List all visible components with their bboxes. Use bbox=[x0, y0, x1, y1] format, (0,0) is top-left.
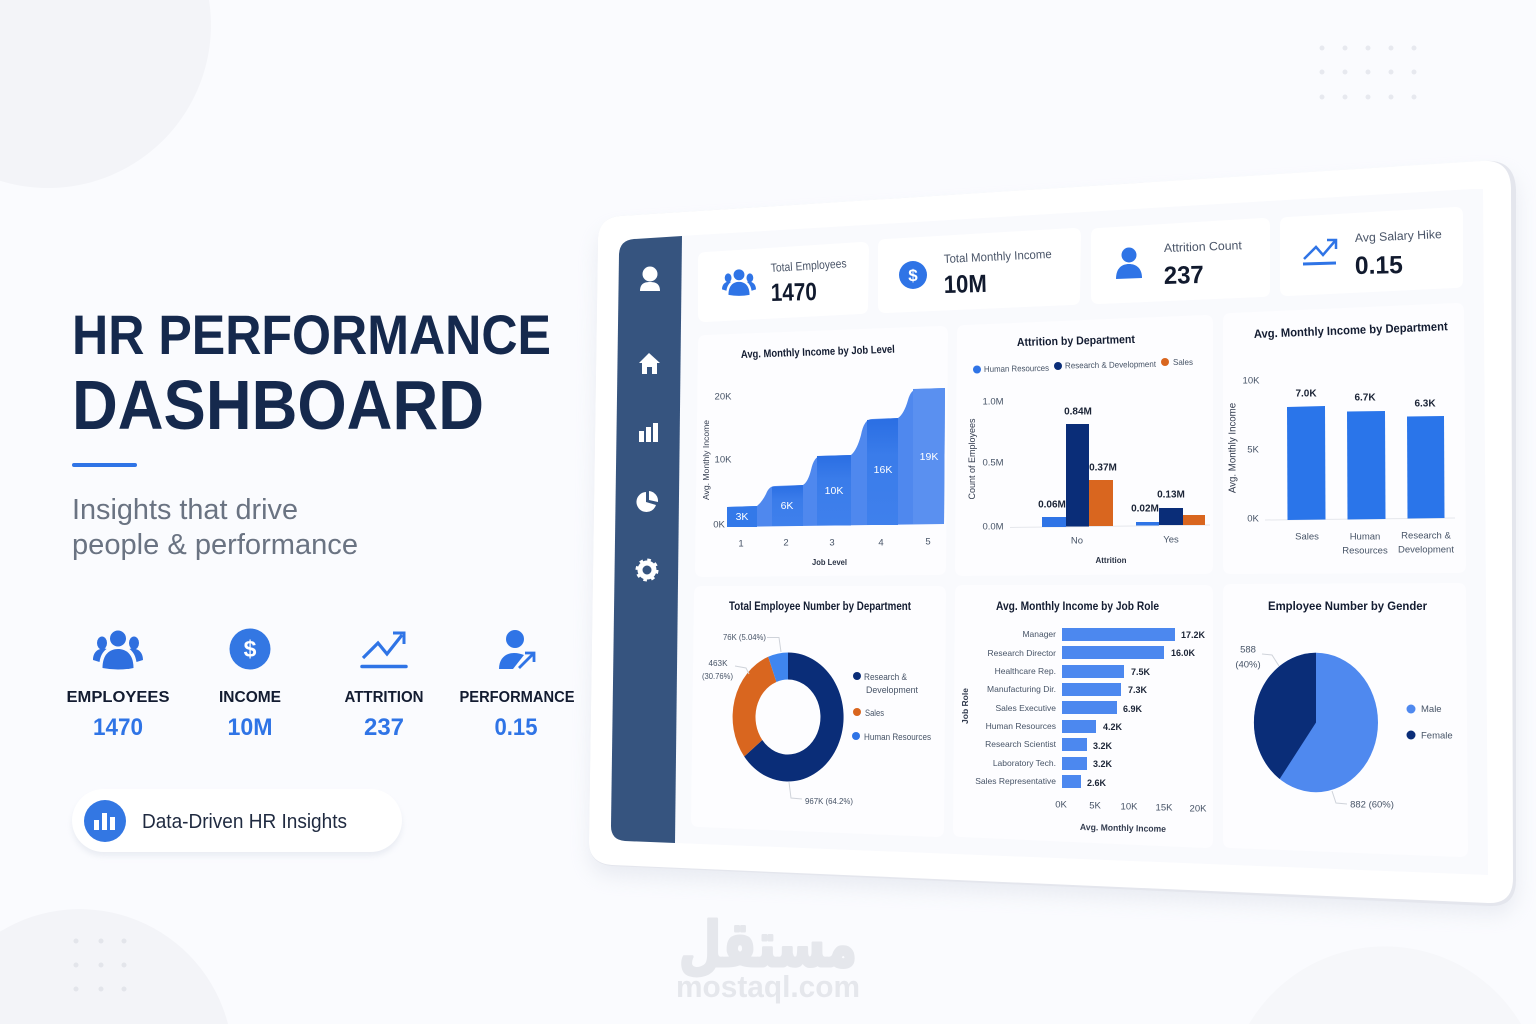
axis labels: Human bbox=[1350, 532, 1380, 542]
axis labels: 0.0M bbox=[982, 522, 1004, 532]
axis labels: 20K bbox=[1190, 804, 1207, 814]
chart card: income by job role: Avg. Monthly Income by Job Role bbox=[996, 599, 1159, 613]
subtitle bbox=[72, 494, 358, 561]
horizontal bar chart: 3.2K bbox=[1093, 741, 1113, 751]
stat: attrition bbox=[344, 633, 424, 741]
horizontal bar chart: Manufacturing Dir. bbox=[987, 684, 1056, 694]
axis labels: 0K bbox=[713, 520, 725, 530]
badge: data-driven insights: Data-Driven HR Insights bbox=[142, 811, 347, 833]
donut labels: 76K (5.04%) bbox=[723, 632, 766, 642]
stat: income bbox=[219, 628, 281, 741]
donut labels: 967K (64.2%) bbox=[805, 796, 853, 806]
horizontal bar chart: 6.9K bbox=[1123, 704, 1143, 714]
stat: performance bbox=[460, 630, 575, 741]
kpi card: avg salary hike bbox=[1280, 207, 1463, 296]
icon: bars bbox=[84, 800, 126, 842]
stat: attrition: ATTRITION bbox=[344, 689, 424, 706]
horizontal bar chart: Healthcare Rep. bbox=[995, 666, 1056, 676]
axis labels: 0.5M bbox=[982, 458, 1004, 468]
accent line bbox=[72, 463, 137, 467]
icon: dollar bbox=[899, 261, 927, 289]
title: HR PERFORMANCE bbox=[72, 303, 551, 366]
kpi card: avg salary hike: 0.15 bbox=[1355, 251, 1403, 280]
horizontal bar chart: 17.2K bbox=[1181, 630, 1206, 640]
grouped bars: 0.84M bbox=[1064, 406, 1092, 418]
horizontal bar chart: 7.3K bbox=[1128, 685, 1148, 695]
icon: trend bbox=[1303, 240, 1336, 264]
bar chart: 6.3K bbox=[1414, 398, 1436, 410]
axis labels: Avg. Monthly Income bbox=[701, 420, 711, 500]
area chart: 10K bbox=[825, 485, 843, 497]
axis labels: Sales bbox=[1295, 532, 1319, 542]
bar chart: 6.7K bbox=[1354, 392, 1376, 404]
legend: Sales bbox=[1173, 357, 1193, 367]
kpi card: total monthly income: Total Monthly Income bbox=[943, 247, 1052, 266]
area chart bbox=[727, 388, 945, 527]
axis labels: 4 bbox=[878, 538, 884, 548]
subtitle: people & performance bbox=[72, 529, 358, 561]
legend: Sales bbox=[865, 708, 885, 718]
axis labels: 3 bbox=[829, 538, 835, 548]
sidebar bbox=[611, 236, 682, 843]
axis labels: 1.0M bbox=[982, 396, 1004, 408]
axis labels bbox=[1228, 376, 1454, 556]
background circle: top left bbox=[0, 0, 211, 188]
donut labels bbox=[702, 632, 853, 806]
chart card: employees by department: Total Employee Number by Department bbox=[729, 599, 911, 613]
icon: person bbox=[640, 266, 660, 291]
dashboard mockup bbox=[589, 161, 1516, 914]
axis labels: Research & bbox=[1401, 530, 1451, 542]
background circle: bottom right bbox=[1249, 946, 1521, 1024]
legend: Female bbox=[1421, 730, 1453, 742]
chart card: attrition by department: Attrition by Department bbox=[1017, 334, 1135, 349]
icon: bar chart bbox=[639, 423, 658, 442]
kpi card: attrition count: 237 bbox=[1163, 261, 1204, 290]
axis labels: No bbox=[1071, 536, 1083, 546]
legend: Development bbox=[866, 685, 919, 695]
area chart: 6K bbox=[781, 500, 793, 512]
horizontal bar chart: Sales Representative bbox=[975, 776, 1056, 786]
legend: Human Resources bbox=[864, 732, 932, 742]
kpi card: total employees: 1470 bbox=[771, 278, 817, 307]
bar chart: 7.0K bbox=[1295, 388, 1317, 400]
dot grid: top right bbox=[1320, 46, 1416, 100]
stat: performance: 0.15 bbox=[494, 714, 538, 741]
axis labels bbox=[960, 688, 1207, 834]
horizontal bar chart: Sales Executive bbox=[996, 703, 1056, 713]
axis labels: 10K bbox=[1243, 376, 1260, 386]
axis labels: 5 bbox=[925, 536, 931, 548]
kpi card: total employees bbox=[698, 242, 869, 322]
pie labels bbox=[1235, 644, 1394, 810]
axis labels: Yes bbox=[1163, 534, 1179, 546]
axis labels: Avg. Monthly Income bbox=[1228, 403, 1238, 493]
icon: trend bbox=[362, 633, 406, 666]
legend: Male bbox=[1421, 704, 1442, 715]
horizontal bar chart: Manager bbox=[1022, 629, 1056, 639]
axis labels: Resources bbox=[1342, 546, 1388, 556]
horizontal bar chart: 7.5K bbox=[1131, 667, 1151, 677]
grouped bars bbox=[1010, 406, 1210, 528]
chart card: income by job level: Avg. Monthly Income by Job Level bbox=[741, 344, 895, 361]
axis labels: Development bbox=[1398, 544, 1454, 556]
chart card: employees by gender bbox=[1223, 583, 1468, 857]
grouped bars: 0.06M bbox=[1038, 500, 1066, 510]
axis labels: 15K bbox=[1156, 802, 1173, 814]
icon: people bbox=[722, 269, 756, 296]
stat: attrition: 237 bbox=[364, 714, 404, 741]
grouped bars: 0.13M bbox=[1157, 490, 1185, 500]
pie labels: (40%) bbox=[1235, 660, 1261, 670]
axis labels: Avg. Monthly Income bbox=[1080, 822, 1166, 834]
grouped bars: 0.37M bbox=[1089, 462, 1117, 474]
axis labels bbox=[701, 392, 931, 567]
axis labels: 2 bbox=[783, 538, 789, 548]
kpi card: avg salary hike: Avg Salary Hike bbox=[1355, 227, 1442, 245]
legend: Human Resources bbox=[984, 363, 1049, 374]
stat: employees: 1470 bbox=[93, 714, 143, 741]
chart card: employees by department bbox=[691, 586, 946, 837]
icon: dollar: $ bbox=[908, 266, 918, 285]
axis labels: Count of Employees bbox=[967, 418, 977, 500]
kpi card: total employees: Total Employees bbox=[770, 256, 847, 275]
chart card: income by department: Avg. Monthly Income by Department bbox=[1254, 319, 1448, 341]
icon: person bbox=[1116, 248, 1142, 279]
icon: pie bbox=[636, 491, 658, 512]
bar chart bbox=[1265, 388, 1455, 520]
pie labels: 588 bbox=[1240, 644, 1256, 656]
chart card: income by department bbox=[1223, 303, 1466, 574]
title bbox=[72, 303, 551, 444]
pie labels: 882 (60%) bbox=[1350, 800, 1394, 810]
horizontal bar chart: Human Resources bbox=[986, 721, 1056, 731]
stat: employees: EMPLOYEES bbox=[66, 689, 170, 706]
donut chart bbox=[733, 652, 844, 781]
icon: home bbox=[639, 353, 660, 374]
donut labels: (30.76%) bbox=[702, 671, 733, 681]
dot grid: bottom left bbox=[74, 938, 126, 992]
axis labels: 10K bbox=[715, 454, 732, 466]
chart card: income by job level bbox=[695, 326, 948, 577]
stat: performance: PERFORMANCE bbox=[460, 689, 575, 706]
axis labels: Job Role bbox=[960, 688, 970, 724]
legend bbox=[852, 672, 932, 742]
stat: income: 10M bbox=[228, 714, 272, 741]
legend bbox=[1406, 704, 1453, 742]
watermark: mostaql.com bbox=[676, 969, 860, 1004]
chart card: attrition by department bbox=[955, 315, 1213, 576]
axis labels: 10K bbox=[1121, 802, 1138, 812]
content background bbox=[675, 189, 1488, 875]
donut labels: 463K bbox=[708, 658, 728, 668]
horizontal bar chart bbox=[975, 628, 1206, 788]
chart card: employees by gender: Employee Number by Gender bbox=[1268, 599, 1427, 613]
horizontal bar chart: Research Scientist bbox=[985, 739, 1057, 749]
horizontal bar chart: 4.2K bbox=[1103, 722, 1123, 732]
background circle: bottom left bbox=[0, 909, 228, 1024]
kpi card: attrition count bbox=[1091, 218, 1270, 304]
legend: Research & bbox=[864, 672, 907, 682]
stat: income: INCOME bbox=[219, 689, 281, 706]
kpi card: attrition count: Attrition Count bbox=[1164, 238, 1243, 255]
subtitle: Insights that drive bbox=[72, 494, 298, 526]
legend: Research & Development bbox=[1065, 359, 1157, 370]
axis labels: 5K bbox=[1089, 800, 1101, 812]
axis labels: 1 bbox=[738, 538, 744, 550]
badge: data-driven insights bbox=[72, 789, 402, 856]
area chart: 16K bbox=[874, 464, 892, 476]
icon: person arrow bbox=[499, 630, 534, 669]
icon: people bbox=[93, 630, 143, 670]
watermark: مستقل bbox=[679, 908, 857, 981]
axis labels: Job Level bbox=[812, 557, 847, 567]
horizontal bar chart: 3.2K bbox=[1093, 759, 1113, 769]
legend bbox=[973, 357, 1193, 374]
kpi card: total monthly income: 10M bbox=[943, 270, 987, 299]
axis labels: 5K bbox=[1247, 444, 1259, 456]
watermark bbox=[676, 908, 860, 1004]
grouped bars: 0.02M bbox=[1131, 504, 1159, 514]
axis labels: Attrition bbox=[1096, 555, 1126, 565]
axis labels: 20K bbox=[715, 392, 732, 402]
icon: gear bbox=[637, 560, 657, 580]
kpi card: total monthly income bbox=[878, 228, 1081, 313]
axis labels: 0K bbox=[1055, 800, 1067, 810]
stat: employees bbox=[66, 630, 170, 741]
horizontal bar chart: Research Director bbox=[988, 648, 1056, 658]
horizontal bar chart: Laboratory Tech. bbox=[993, 758, 1056, 768]
icon: dollar: $ bbox=[244, 636, 257, 662]
horizontal bar chart: 16.0K bbox=[1171, 648, 1196, 658]
axis labels: 0K bbox=[1247, 514, 1259, 524]
axis labels bbox=[967, 396, 1179, 565]
title: DASHBOARD bbox=[72, 366, 484, 444]
pie chart bbox=[1254, 653, 1378, 792]
chart card: income by job role bbox=[953, 585, 1213, 848]
horizontal bar chart: 2.6K bbox=[1087, 778, 1107, 788]
area chart: 3K bbox=[736, 511, 748, 523]
area chart: 19K bbox=[920, 451, 938, 463]
